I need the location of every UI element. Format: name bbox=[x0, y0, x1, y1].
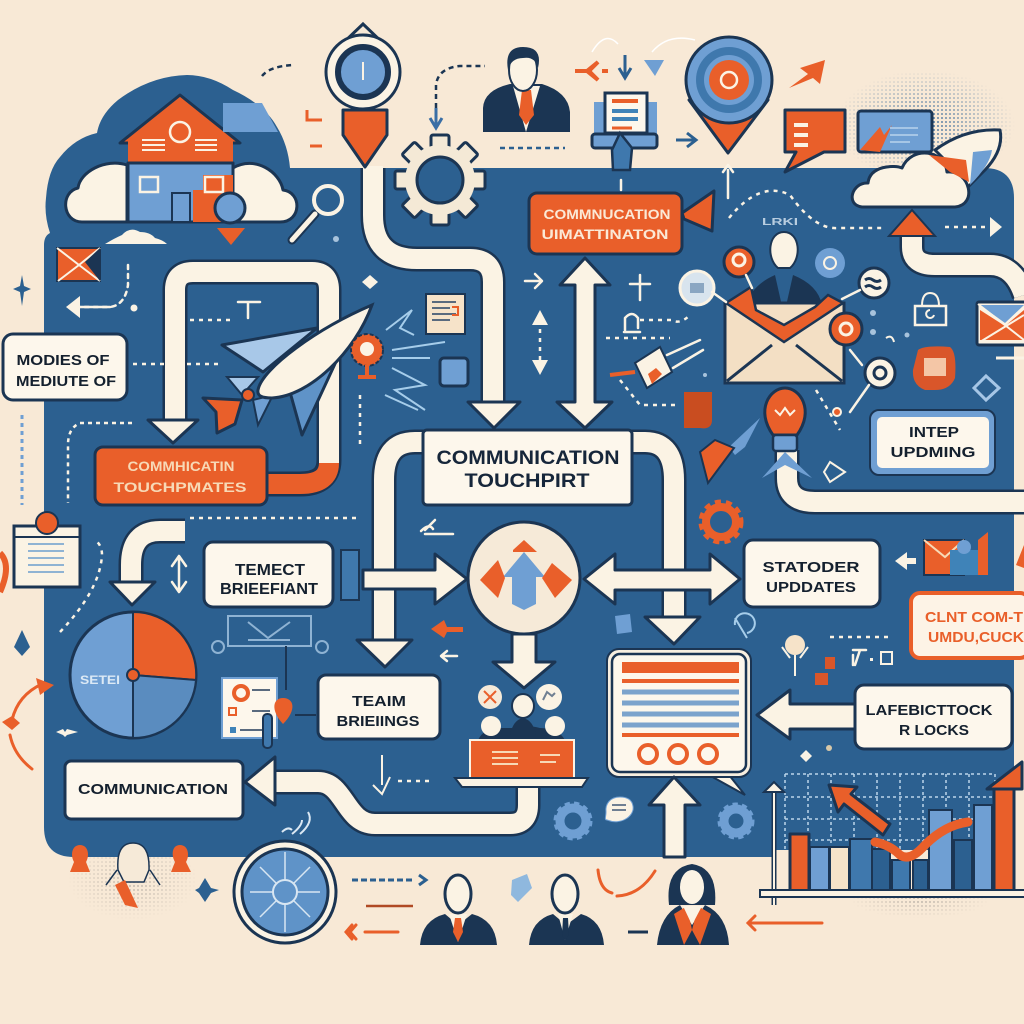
cream tube to central box bbox=[373, 166, 520, 428]
box: orange communication touchpoints bbox=[95, 447, 267, 505]
small lower wing bbox=[253, 395, 273, 425]
gear teeth bbox=[395, 135, 485, 225]
envelope folds bbox=[727, 345, 842, 381]
laptop base bbox=[455, 778, 588, 787]
right badge bbox=[536, 684, 562, 710]
hub bbox=[242, 389, 254, 401]
windows bbox=[140, 122, 223, 192]
left tube arrow head bbox=[357, 640, 412, 667]
dashed arrow right bbox=[945, 217, 1002, 237]
small double arrow bbox=[172, 556, 186, 592]
frame bbox=[607, 649, 751, 777]
double arrow vertical bbox=[557, 258, 612, 428]
top arrow head bbox=[987, 762, 1022, 789]
bottom tube to communication bbox=[245, 757, 528, 824]
text line 2: UPDMING bbox=[890, 444, 976, 461]
orange arrow right bbox=[542, 563, 572, 598]
dashed connector to person bbox=[436, 66, 485, 108]
orange marker bbox=[217, 228, 245, 245]
bulb bbox=[785, 635, 805, 655]
cloud bbox=[852, 153, 969, 207]
persons bbox=[478, 726, 565, 740]
text line 2: BRIEEFIANT bbox=[220, 581, 318, 598]
house upper wall bbox=[128, 140, 233, 164]
envelope body bbox=[725, 303, 844, 383]
icon: small blue chat bbox=[511, 874, 532, 902]
arrow head bbox=[468, 402, 520, 428]
door bbox=[172, 193, 190, 222]
icon: down arrows bbox=[592, 38, 695, 78]
icon: blue window bbox=[858, 111, 932, 152]
icon: small envelope left bbox=[57, 248, 100, 281]
halftone shading bbox=[68, 70, 1020, 920]
box: communication bbox=[65, 761, 243, 819]
tail bbox=[203, 398, 242, 433]
text: LAFEBICTTOCK bbox=[866, 702, 993, 719]
text: TEMECT bbox=[235, 562, 305, 579]
arrow head bbox=[889, 210, 935, 236]
icon: envelope with person bbox=[725, 232, 844, 383]
diagonal arrow bbox=[829, 785, 890, 835]
icon: gear top bbox=[395, 135, 485, 225]
grid bbox=[785, 774, 995, 850]
person woman bbox=[657, 864, 729, 945]
box: communication ultimate bbox=[529, 191, 714, 254]
center dot bbox=[127, 669, 139, 681]
person bottom 2 bbox=[529, 875, 604, 945]
icon: envelope with person bbox=[924, 532, 988, 575]
text: STATODER bbox=[762, 559, 860, 576]
swirl bbox=[735, 613, 755, 638]
small dashes in frame bbox=[22, 236, 378, 505]
text line 2: UIMATTINATON bbox=[542, 226, 668, 242]
up arrow bbox=[503, 552, 545, 610]
up arrow tube right bbox=[889, 210, 1024, 295]
blue slice bbox=[133, 675, 196, 738]
orange target bbox=[830, 313, 862, 345]
icon: bottom person left pins bbox=[70, 845, 191, 872]
tubes around central box bbox=[384, 442, 674, 642]
dashed left arrow bbox=[66, 265, 138, 318]
icon: gears bottom bbox=[556, 804, 752, 838]
rounded rectangle arrow with plane bbox=[148, 272, 329, 484]
dashed corner line bbox=[620, 380, 675, 405]
icon: small blue square bbox=[440, 358, 468, 386]
y axis bbox=[772, 790, 776, 905]
text line 2: UMDU,CUCK bbox=[928, 629, 1024, 646]
icon: magnifier bbox=[292, 186, 342, 240]
text line 2: MEDIUTE OF bbox=[16, 373, 116, 390]
icon: top map pin bbox=[326, 24, 400, 167]
icon: bottom faint person bbox=[106, 843, 160, 908]
lines bbox=[622, 681, 739, 735]
box: communication touchpoint bbox=[423, 430, 632, 505]
body bbox=[258, 305, 372, 398]
double arrow horizontal and vertical tube bbox=[584, 554, 740, 604]
house orange wing bbox=[193, 175, 233, 222]
orange curved arrows bbox=[2, 678, 54, 769]
connector from document bbox=[620, 180, 622, 190]
head bbox=[770, 232, 798, 268]
text line 2: BRIEIINGS bbox=[336, 713, 420, 730]
orange blocks bbox=[825, 657, 835, 669]
orange box bbox=[529, 193, 682, 254]
x axis bbox=[760, 890, 1024, 897]
text: MODIES OF bbox=[16, 352, 110, 369]
icon: orange left arrow bbox=[431, 620, 463, 638]
pie label: SETEI bbox=[80, 673, 120, 687]
icon: document on stand bbox=[592, 93, 657, 170]
icon: house with clouds bbox=[66, 95, 297, 245]
icon: orange gear bbox=[701, 502, 741, 542]
icon: cloud and rocket bbox=[852, 130, 1001, 207]
icon: light bulb bbox=[762, 388, 812, 478]
main blue panel bbox=[44, 75, 1014, 857]
icon: paper rocket bbox=[203, 305, 372, 435]
icon: person top bbox=[483, 47, 570, 132]
bubble tail bbox=[700, 770, 745, 795]
dashed line lower bbox=[190, 517, 360, 519]
icon: orange chat bubble bbox=[785, 110, 845, 172]
arrow head bbox=[245, 757, 275, 805]
orange arrow left bbox=[480, 560, 505, 598]
small double arrow dashed bbox=[525, 274, 650, 375]
orange left arrow bottom bbox=[748, 916, 822, 930]
arrow below globe bbox=[493, 634, 555, 688]
window lines bbox=[142, 140, 217, 150]
cream bubble bbox=[680, 271, 714, 305]
orange tube end bbox=[262, 463, 329, 484]
orange curved arrow bottom bbox=[598, 870, 655, 896]
box: client comment bbox=[911, 593, 1024, 658]
sphere bbox=[215, 193, 245, 223]
icon: left star bbox=[13, 275, 31, 306]
icon: left diamond bbox=[14, 630, 30, 656]
text: CLNT COM-T bbox=[925, 609, 1023, 626]
dashed path right bbox=[729, 191, 882, 228]
orange slice bbox=[133, 612, 196, 680]
house roof bbox=[120, 95, 240, 143]
icon: big map pin bbox=[686, 37, 772, 153]
small wing bbox=[227, 377, 258, 395]
arrow head bbox=[148, 420, 198, 443]
arrow right to globe bbox=[363, 554, 467, 604]
icon: hand card bbox=[610, 340, 703, 388]
orange header bbox=[622, 662, 739, 673]
small dots bbox=[703, 310, 910, 377]
box: lafebicttock bbox=[855, 685, 1012, 749]
icon: presenter group bbox=[455, 684, 588, 787]
person bottom 1 bbox=[420, 875, 497, 945]
arrow to window bbox=[757, 690, 855, 739]
envelope flap bbox=[726, 287, 843, 342]
pie chart bbox=[70, 612, 196, 738]
small icons middle bbox=[615, 613, 892, 685]
arrow up to window bbox=[649, 777, 700, 857]
icon bubbles around envelope bbox=[680, 247, 895, 412]
text line 2: UPDDATES bbox=[766, 579, 856, 596]
small link icon bbox=[606, 314, 690, 338]
suit bbox=[746, 275, 822, 335]
sketched strokes bbox=[385, 310, 445, 410]
right tube arrow head bbox=[645, 617, 700, 644]
cloud right bbox=[233, 163, 297, 222]
small dash marks bbox=[421, 520, 453, 534]
icon: form with orange ball bbox=[14, 512, 80, 587]
glyphs bbox=[853, 650, 866, 665]
icon: small diamond bbox=[974, 376, 999, 400]
text line 2: R LOCKS bbox=[899, 722, 969, 739]
wing left bbox=[222, 328, 317, 372]
orange bubble bbox=[724, 247, 754, 277]
icon: orange seal bbox=[351, 334, 383, 378]
small white arrow bbox=[441, 651, 457, 661]
icon: arrow to pin bbox=[676, 133, 696, 147]
icon: checklist card bbox=[222, 678, 316, 748]
dashed line under person bbox=[500, 147, 565, 149]
rocket body bbox=[935, 130, 1001, 187]
text: COMMUNICATION bbox=[436, 448, 620, 469]
text: COMMNUCATION bbox=[544, 206, 670, 222]
icon: document bbox=[426, 294, 465, 334]
house lower wall bbox=[128, 163, 233, 222]
box: statoder updates bbox=[744, 540, 880, 607]
dashed connector top left bbox=[262, 65, 294, 76]
wing right bbox=[290, 353, 340, 435]
tube to pie chart bbox=[110, 531, 185, 605]
box: temect briefiant bbox=[204, 542, 333, 607]
left badge bbox=[478, 685, 502, 709]
blue connector bbox=[341, 550, 359, 600]
buttons bbox=[639, 745, 657, 763]
icon: lock bbox=[915, 293, 946, 325]
small orange marker bbox=[307, 110, 322, 146]
icon: globe bbox=[468, 522, 580, 634]
orange edge mark bbox=[0, 553, 6, 592]
text: COMMUNICATION bbox=[78, 781, 228, 798]
dark bubble bbox=[859, 268, 889, 298]
icon: dial bbox=[234, 841, 336, 943]
chart backdrop bbox=[772, 770, 1014, 850]
icon: small cloud bbox=[105, 230, 167, 244]
orange arrow top bbox=[513, 540, 537, 552]
chart bits bbox=[800, 745, 832, 762]
signal arcs bbox=[282, 812, 310, 834]
label: LRKI: LRKI bbox=[762, 217, 798, 228]
text: COMMHICATIN bbox=[128, 458, 234, 474]
icon: small star bbox=[56, 729, 78, 737]
orange mark at edge bbox=[1016, 545, 1024, 568]
dashed row bbox=[830, 636, 892, 638]
dashed arrow bottom bbox=[346, 875, 426, 939]
box: modies of bbox=[3, 334, 127, 400]
cloud left bbox=[66, 163, 127, 222]
icon: down arrow small bbox=[430, 108, 442, 128]
blue flag bbox=[615, 614, 632, 634]
icon: diamond orange bbox=[575, 62, 608, 80]
blue bubble bbox=[815, 248, 845, 278]
small arrow left bbox=[895, 552, 916, 570]
blue flag bbox=[223, 103, 278, 132]
rocket blue side bbox=[970, 150, 992, 185]
dark ring bubble bbox=[865, 358, 895, 388]
icon: orange arrow bbox=[789, 60, 825, 88]
bars bbox=[790, 834, 809, 893]
icon: bottom diamond bbox=[195, 878, 219, 902]
megaphone cone bbox=[682, 191, 714, 231]
box: intep updming bbox=[870, 410, 995, 475]
gear rim bbox=[405, 145, 475, 215]
text line 2: TOUCHPIRT bbox=[464, 471, 590, 492]
tube from bulb bbox=[787, 450, 1024, 502]
arrow head bbox=[110, 582, 155, 605]
text: TEAIM bbox=[352, 693, 406, 710]
small connector lines bbox=[816, 390, 845, 482]
trend squiggle bbox=[875, 822, 968, 857]
rocket flame bbox=[929, 155, 969, 182]
icon: orange speech bbox=[684, 392, 712, 428]
icon: paintbrush bbox=[700, 418, 760, 483]
icon: right envelope bbox=[977, 302, 1024, 358]
text line 2: TOUCHPMATES bbox=[114, 479, 246, 495]
box: team briefings bbox=[318, 675, 440, 739]
dashed curve by pie bbox=[60, 540, 102, 632]
icon: blue envelope frame bbox=[212, 616, 328, 690]
text: INTEP bbox=[909, 424, 959, 441]
icon: orange document badge bbox=[913, 346, 955, 390]
chart bbox=[760, 762, 1024, 905]
laptop screen bbox=[470, 740, 574, 778]
gear hole bbox=[417, 157, 463, 203]
small down arrow bbox=[373, 755, 433, 794]
short dash bbox=[628, 930, 648, 934]
window panel bbox=[607, 649, 751, 795]
icon: small speech bubble bbox=[605, 797, 633, 822]
connector up bbox=[723, 165, 733, 198]
